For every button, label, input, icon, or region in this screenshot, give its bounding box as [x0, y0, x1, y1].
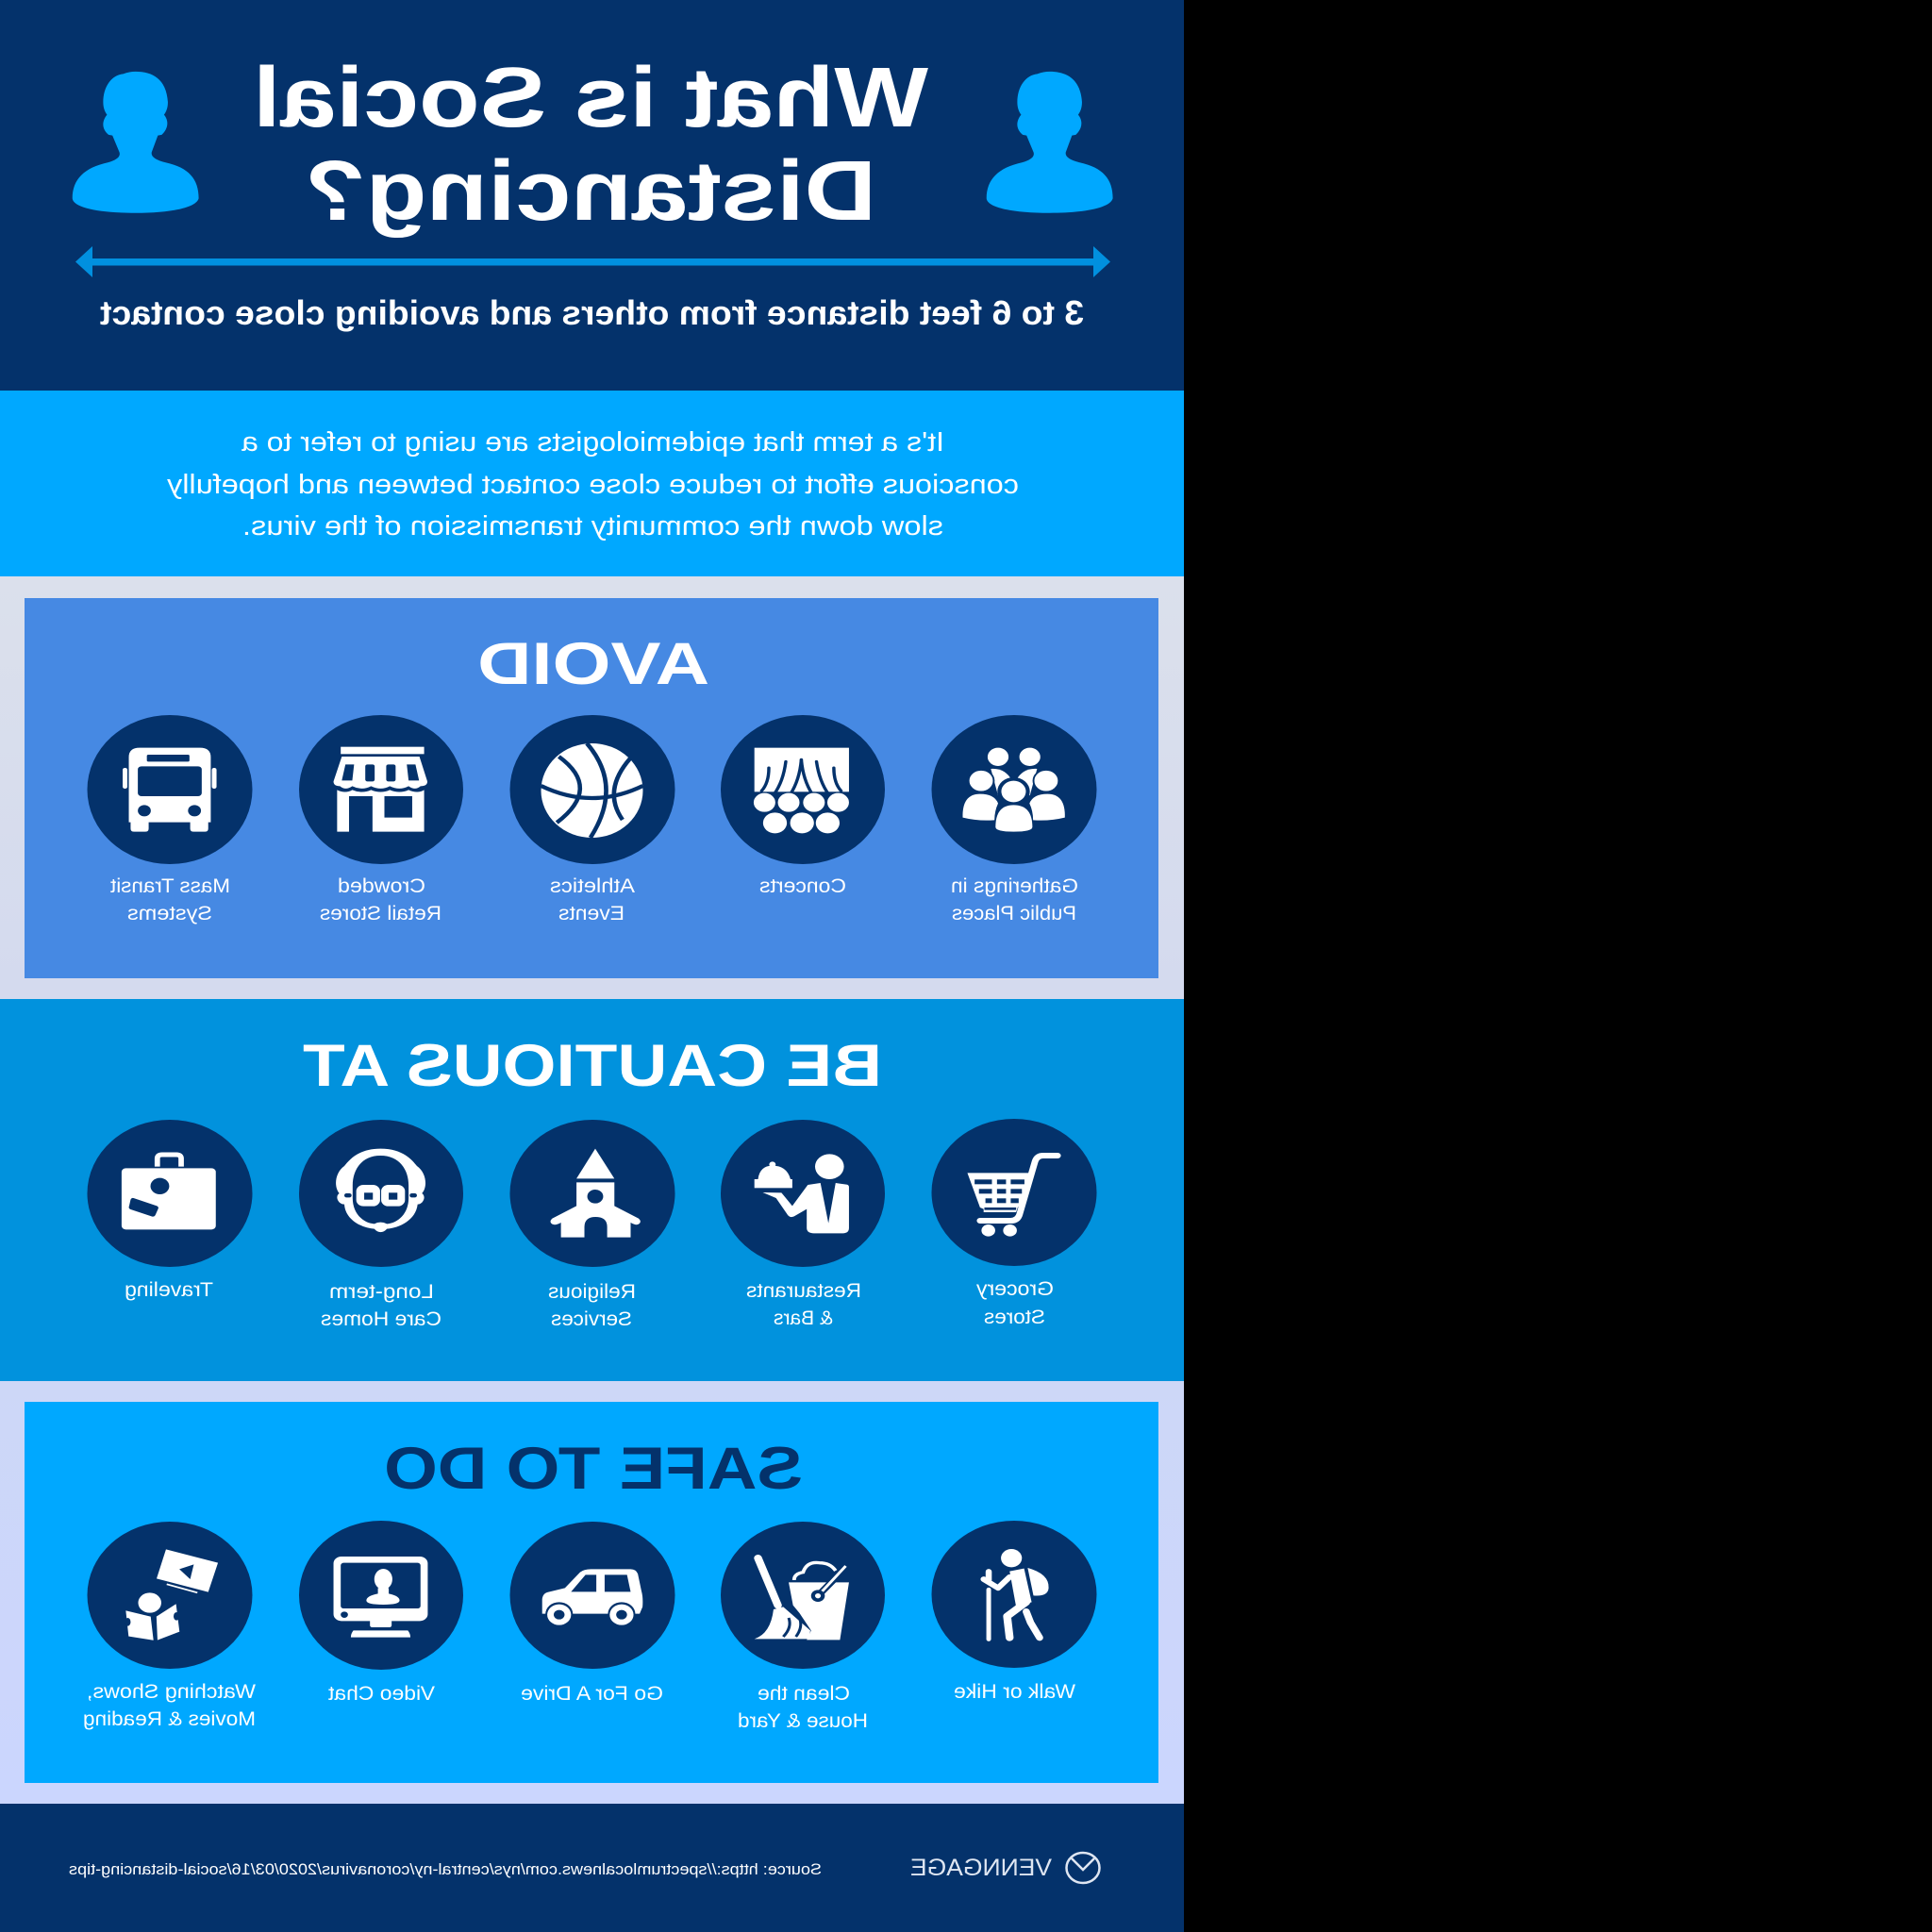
title: Distancing? [305, 144, 876, 239]
panel: avoid [0, 576, 1184, 999]
heading: safe to do: SAFE TO DO [384, 1436, 803, 1502]
label: House & Yard [738, 1710, 868, 1732]
label [951, 875, 1078, 924]
source text: Source: https://spectrumlocalnews.com/nys/central-ny/coronavirus/2020/03/16/social-distancing-tips [69, 1860, 822, 1878]
label: Grocery [975, 1278, 1054, 1300]
panel: be cautious at [0, 999, 1184, 1381]
icon: concert crowd and curtain [753, 748, 850, 833]
label: Restaurants [746, 1280, 861, 1302]
icon: store [334, 747, 427, 832]
icon: broom and bucket [755, 1558, 849, 1640]
label: Athletics [550, 875, 635, 897]
footer [0, 1804, 1184, 1932]
label: Mass Transit [110, 875, 230, 897]
icon: bus [123, 748, 217, 832]
heading: be cautious at: BE CAUTIOUS AT [303, 1033, 882, 1099]
panel: safe to do [0, 1381, 1184, 1804]
definition text: conscious effort to reduce close contact between and hopefully [166, 470, 1019, 500]
icon: shopping cart [967, 1156, 1058, 1237]
item: restaurants and bars [721, 1120, 885, 1329]
label [320, 875, 441, 924]
label: Services [551, 1308, 632, 1330]
label: Systems [127, 903, 212, 924]
item: walk or hike [932, 1521, 1096, 1703]
icon: church [551, 1149, 641, 1238]
panel: definition [0, 391, 1184, 576]
label [738, 1683, 868, 1732]
label: Stores [984, 1307, 1045, 1328]
item: watching shows, movies and reading [83, 1522, 256, 1730]
label: Traveling [125, 1279, 213, 1301]
label: & Bars [774, 1307, 833, 1329]
item: grocery stores [932, 1119, 1096, 1328]
label: Gatherings in [951, 875, 1078, 897]
label: Watching Shows, [87, 1681, 256, 1703]
header panel [0, 0, 1184, 391]
label: Events [558, 903, 625, 924]
icon: suitcase [122, 1155, 216, 1229]
item: go for a drive [509, 1522, 675, 1705]
label: Go For A Drive [521, 1683, 663, 1705]
label: Religious [548, 1281, 636, 1303]
label: Crowded [338, 875, 425, 897]
item: clean the house and yard [721, 1522, 885, 1732]
icon: elderly face [336, 1149, 425, 1232]
icon: right person [987, 72, 1113, 213]
item: religious services [509, 1120, 675, 1330]
subtitle: 3 to 6 feet distance from others and avoiding close contact [100, 293, 1084, 332]
icon: hiker [984, 1549, 1049, 1640]
item: video chat [299, 1521, 463, 1705]
icon: basketball [541, 743, 643, 838]
label: Clean the [758, 1683, 850, 1705]
item: gatherings in public places [932, 715, 1096, 924]
definition text: It's a term that epidemiologists are using to refer to a [241, 427, 944, 458]
logo: venngage: VENNGAGE [910, 1855, 1052, 1881]
icon: car [542, 1569, 642, 1626]
arrow: six feet distance [75, 246, 1110, 277]
item: long-term care homes [299, 1120, 463, 1330]
item: mass transit [87, 715, 253, 924]
label: Care Homes [321, 1308, 441, 1330]
icon: group of people [962, 748, 1065, 832]
label [110, 875, 230, 924]
item: concerts [721, 715, 885, 897]
label: Public Places [952, 903, 1076, 924]
item: traveling [87, 1120, 253, 1301]
item: crowded retail stores [299, 715, 463, 924]
label: Retail Stores [320, 903, 441, 924]
icon: left person [73, 72, 199, 213]
label: Long-term [329, 1281, 434, 1303]
label: Concerts [759, 875, 846, 897]
label [548, 1281, 636, 1330]
definition text: slow down the community transmission of the virus. [242, 511, 943, 541]
label: Walk or Hike [954, 1681, 1075, 1703]
icon: monitor with person [334, 1557, 427, 1638]
label: Video Chat [328, 1683, 435, 1705]
label [975, 1278, 1054, 1328]
title: What is Social [253, 51, 928, 145]
icon: screen and reader [125, 1549, 218, 1641]
label: Movies & Reading [83, 1708, 256, 1730]
item: athletics events [509, 715, 675, 924]
heading: avoid: AVOID [477, 631, 709, 697]
label [746, 1280, 861, 1329]
definition text [166, 427, 1019, 541]
logo: venngage [910, 1853, 1100, 1883]
label [83, 1681, 256, 1730]
title [253, 51, 928, 239]
label [550, 875, 635, 924]
icon: waiter [755, 1154, 849, 1233]
label [321, 1281, 441, 1330]
